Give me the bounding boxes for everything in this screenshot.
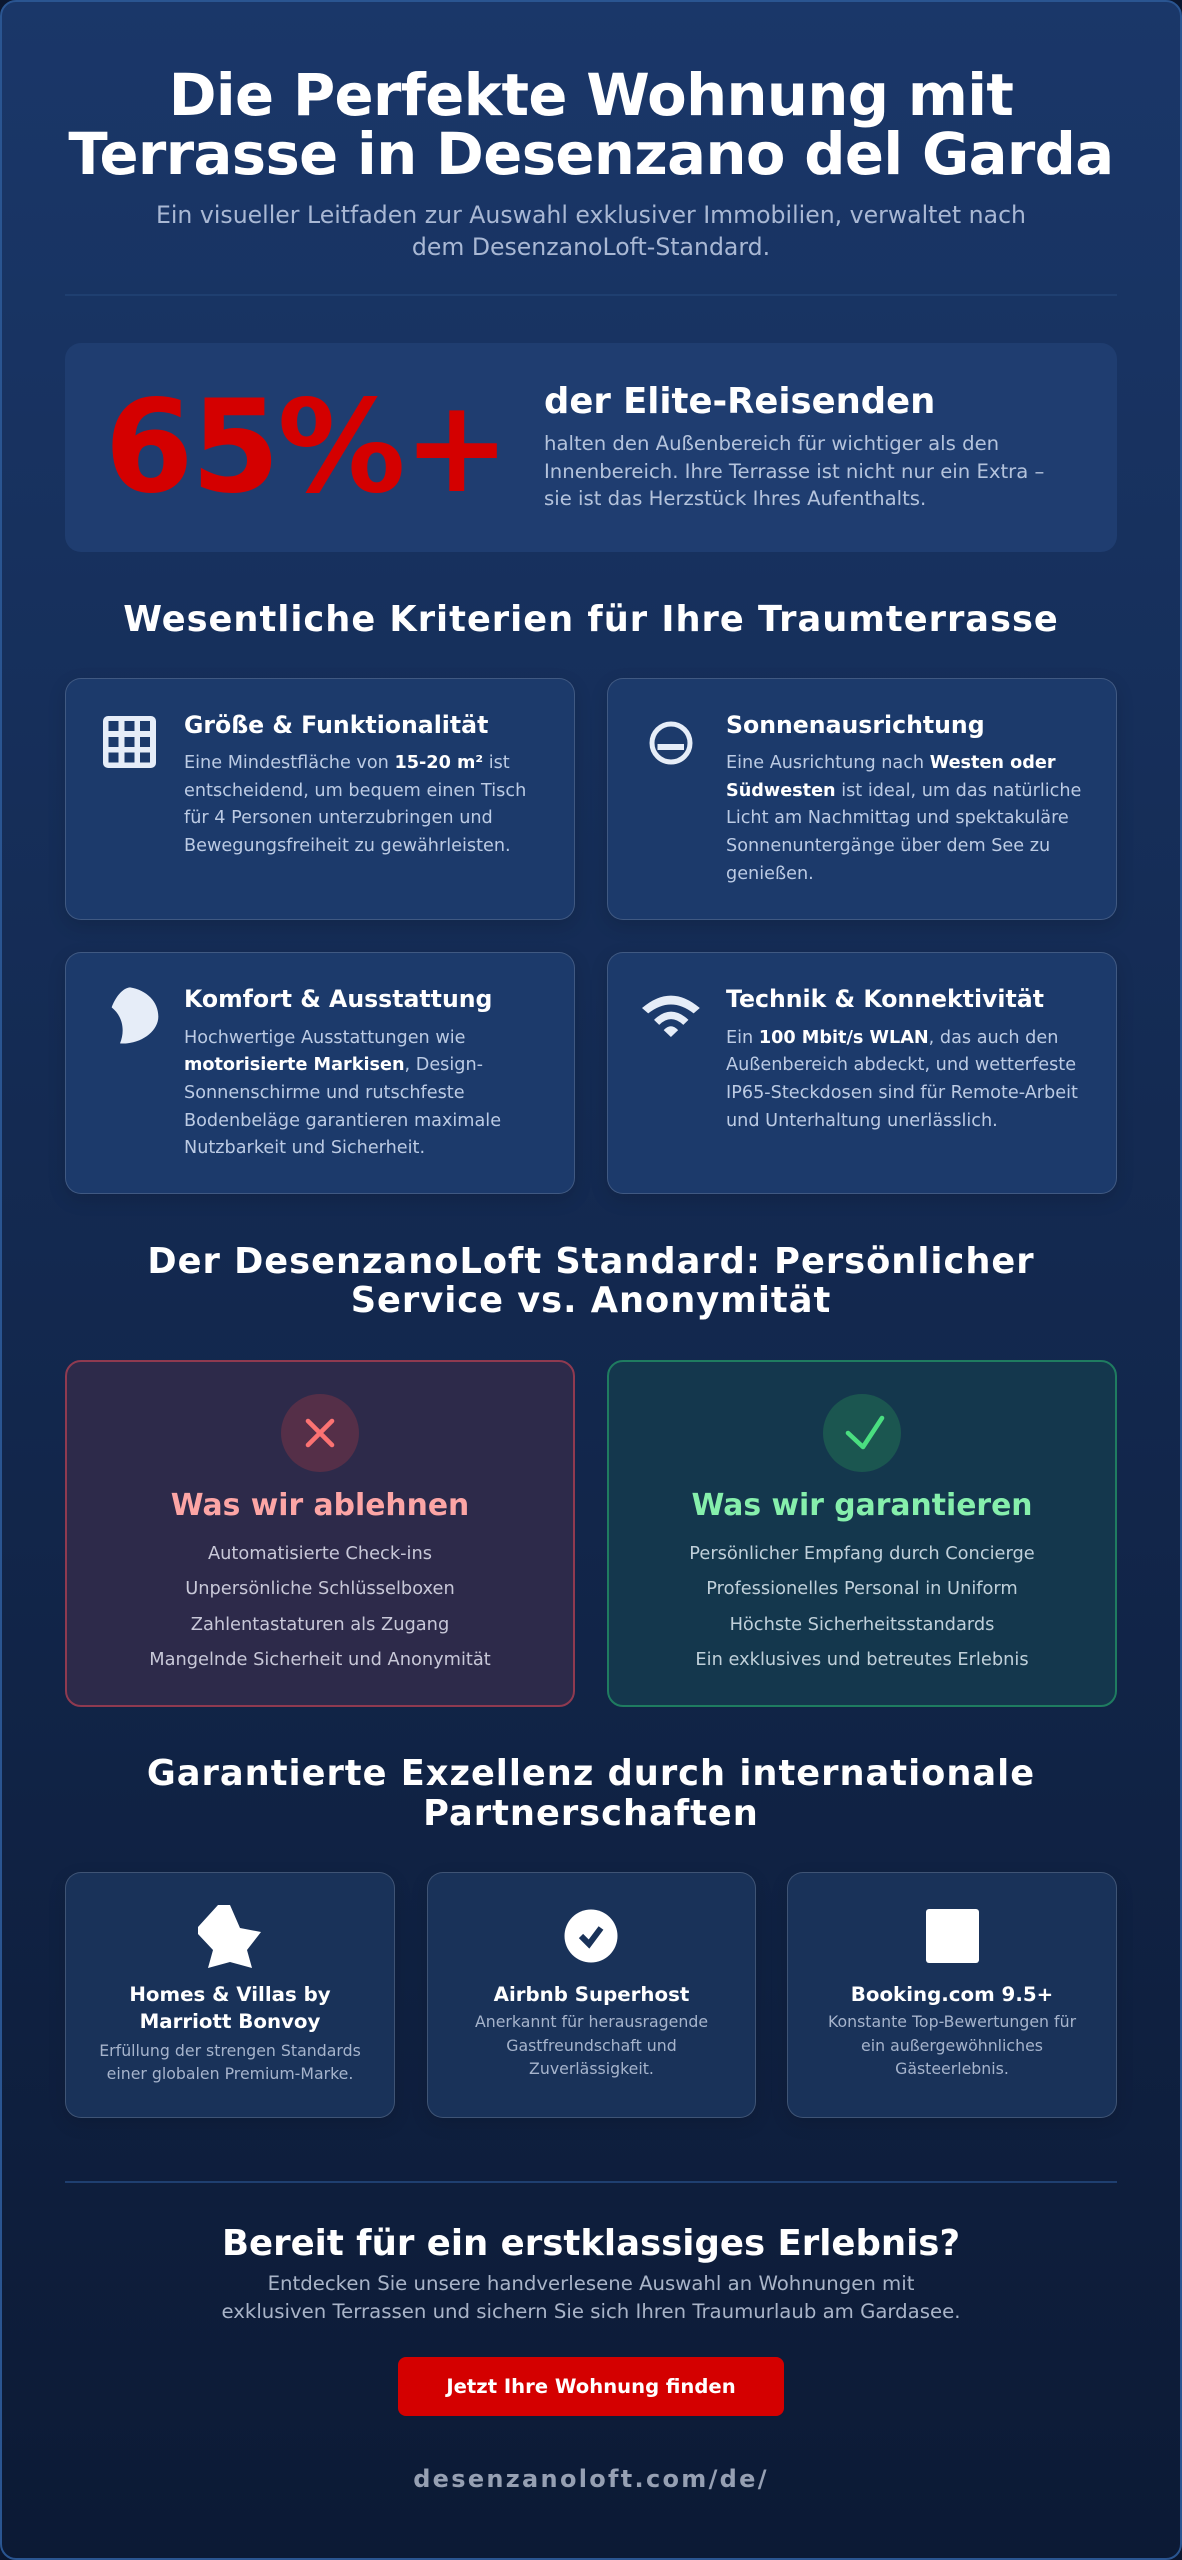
card text: size: für 4 Personen unterzubringen und (184, 808, 493, 828)
card text: size: entscheidend, um bequem einen Tisch (184, 781, 526, 801)
heading: partnerships (147, 1753, 1035, 1834)
icon: grid (103, 716, 156, 768)
list: guarantee: Höchste Sicherheitsstandards (730, 1614, 994, 1634)
title: Die Perfekte Wohnung mit (169, 62, 1013, 129)
panel: Airbnb (427, 1872, 756, 2118)
partner text: Airbnb (475, 2012, 708, 2078)
partner text: Airbnb: Zuverlässigkeit. (529, 2059, 654, 2078)
icon: wifi (642, 996, 700, 1037)
website url: desenzanoloft.com/de/ (413, 2465, 769, 2493)
heading: partnerships: Garantierte Exzellenz durch internationale (147, 1753, 1035, 1794)
partner text: Booking: Konstante Top-Bewertungen für (828, 2012, 1076, 2031)
card text: comfort: Hochwertige Ausstattungen wie (184, 1028, 466, 1048)
card text: sun: Licht am Nachmittag und spektakuläre (726, 808, 1069, 828)
statistic heading: der Elite-Reisenden (544, 381, 935, 422)
title: Terrasse in Desenzano del Garda (68, 121, 1114, 188)
panel: what we guarantee (607, 1360, 1117, 1707)
icon: cross (281, 1394, 359, 1472)
partner text: Booking (828, 2012, 1076, 2078)
heading: criteria: Wesentliche Kriterien für Ihre Traumterrasse (123, 599, 1059, 640)
list: guarantee (689, 1542, 1035, 1670)
icon: check badge (564, 1910, 618, 1962)
heading: guarantee: Was wir garantieren (691, 1488, 1033, 1523)
heading: reject: Was wir ablehnen (171, 1488, 469, 1523)
button (398, 2357, 784, 2416)
card text: technology: und Unterhaltung unerlässlich. (726, 1111, 998, 1131)
list: guarantee: Persönlicher Empfang durch Concierge (689, 1542, 1035, 1564)
partner name: Marriott (129, 1982, 331, 2033)
partner text: Marriott: Erfüllung der strengen Standards (99, 2040, 361, 2060)
icon: sun (650, 722, 692, 764)
card text: sun: Sonnenuntergänge über dem See zu (726, 836, 1050, 856)
heading: standard (147, 1240, 1035, 1321)
partner name: Booking: Booking.com 9.5+ (851, 1982, 1053, 2006)
partner text: Booking: ein außergewöhnliches (861, 2036, 1043, 2055)
card text: technology: IP65-Steckdosen sind für Remote-Arbeit (726, 1083, 1078, 1103)
card text: comfort: Sonnenschirme und rutschfeste (184, 1083, 465, 1103)
card text: comfort (184, 1028, 501, 1158)
list: reject: Unpersönliche Schlüsselboxen (185, 1578, 455, 1599)
subtitle (156, 201, 1026, 261)
panel: Booking (787, 1872, 1117, 2118)
subtitle: Ein visueller Leitfaden zur Auswahl exklusiver Immobilien, verwaltet nach (156, 201, 1026, 229)
statistic description (544, 432, 1044, 510)
partner text: Marriott (99, 2040, 361, 2083)
statistic description: Innenbereich. Ihre Terrasse ist nicht nur ein Extra – (544, 460, 1044, 482)
heading: standard: Service vs. Anonymität (351, 1280, 831, 1321)
list: reject: Automatisierte Check-ins (208, 1542, 432, 1564)
heading: standard: Der DesenzanoLoft Standard: Persönlicher (147, 1240, 1035, 1282)
card text: comfort: motorisierte Markisen, Design- (184, 1055, 483, 1075)
card text: sun: genießen. (726, 864, 814, 884)
card text: comfort: Nutzbarkeit und Sicherheit. (184, 1138, 425, 1158)
card heading: size: Größe & Funktionalität (184, 711, 488, 739)
card text: technology (726, 1028, 1078, 1131)
card heading: technology: Technik & Konnektivität (726, 985, 1044, 1013)
partner name: Marriott: Marriott Bonvoy (140, 2010, 320, 2033)
call to action heading: Bereit für ein erstklassiges Erlebnis? (222, 2223, 960, 2264)
card heading: sun: Sonnenausrichtung (726, 711, 985, 739)
icon: moon (112, 987, 158, 1044)
list: reject (149, 1542, 491, 1670)
panel: what we reject (65, 1360, 575, 1707)
panel: size and function (65, 678, 575, 920)
card text: comfort: Bodenbeläge garantieren maximale (184, 1111, 501, 1131)
card text: sun: Eine Ausrichtung nach Westen oder (726, 753, 1056, 773)
partner name: Airbnb: Airbnb Superhost (494, 1982, 689, 2006)
card text: sun: Südwesten ist ideal, um das natürliche (726, 781, 1081, 801)
panel: Marriott (65, 1872, 395, 2118)
partner text: Marriott: einer globalen Premium-Marke. (107, 2064, 353, 2083)
panel: technology (607, 952, 1117, 1194)
card text: size: Eine Mindestfläche von 15-20 m² ist (184, 753, 510, 773)
list: guarantee: Professionelles Personal in Uniform (706, 1578, 1018, 1599)
list: reject: Zahlentastaturen als Zugang (191, 1614, 449, 1634)
panel: key statistic (65, 343, 1117, 552)
statistic number: 65%+ (104, 372, 508, 522)
call to action text: exklusiven Terrassen und sichern Sie sich Ihren Traumurlaub am Gardasee. (222, 2300, 960, 2322)
call to action text: Entdecken Sie unsere handverlesene Auswahl an Wohnungen mit (268, 2272, 914, 2294)
panel: comfort (65, 952, 575, 1194)
card text: technology: Ein 100 Mbit/s WLAN, das auch den (726, 1028, 1058, 1048)
statistic description: halten den Außenbereich für wichtiger als den (544, 432, 999, 455)
icon: star (198, 1905, 261, 1968)
partner name: Marriott: Homes & Villas by (129, 1982, 331, 2006)
icon: square (926, 1909, 979, 1963)
card text: technology: Außenbereich abdeckt, und wetterfeste (726, 1055, 1076, 1075)
card heading: comfort: Komfort & Ausstattung (184, 985, 492, 1013)
subtitle: dem DesenzanoLoft-Standard. (412, 233, 770, 261)
partner text: Booking: Gästeerlebnis. (895, 2059, 1009, 2078)
card text: sun (726, 753, 1081, 884)
card text: size: Bewegungsfreiheit zu gewährleisten. (184, 836, 511, 856)
call to action text (222, 2272, 960, 2322)
partner text: Airbnb: Gastfreundschaft und (506, 2036, 677, 2055)
list: guarantee: Ein exklusives und betreutes Erlebnis (695, 1649, 1029, 1670)
list: reject: Mangelnde Sicherheit und Anonymität (149, 1649, 491, 1670)
icon: check (823, 1394, 901, 1472)
panel: sun orientation (607, 678, 1117, 920)
heading: partnerships: Partnerschaften (423, 1792, 759, 1834)
partner text: Airbnb: Anerkannt für herausragende (475, 2012, 708, 2031)
statistic description: sie ist das Herzstück Ihres Aufenthalts. (544, 487, 926, 510)
title (68, 62, 1114, 188)
card text: size (184, 753, 526, 856)
button: Jetzt Ihre Wohnung finden (446, 2375, 736, 2398)
